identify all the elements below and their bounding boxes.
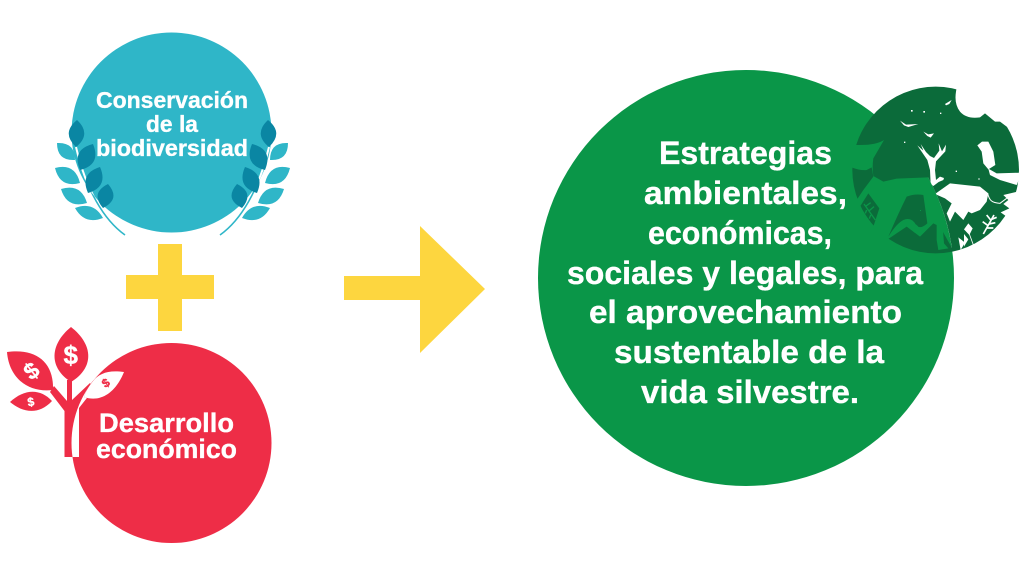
main text block: ambientales, <box>644 175 847 211</box>
leaf: right <box>84 371 124 399</box>
icon: money tree <box>7 327 124 457</box>
heading: biodiversidad: biodiversidad <box>96 135 248 161</box>
dollar sign: left leaf: $ <box>18 356 45 385</box>
leaf: left <box>7 351 53 390</box>
icon: wildlife circle <box>852 87 1019 253</box>
main text block: Estrategias <box>659 135 832 171</box>
icon: yellow plus sign <box>126 244 214 331</box>
icon: right laurel branch <box>220 120 290 235</box>
main text block: vida silvestre. <box>641 374 859 410</box>
icon: left laurel branch <box>55 120 125 235</box>
heading: de la: de la <box>146 111 199 137</box>
main text block: sociales y legales, para <box>567 255 923 291</box>
leaf: small <box>10 392 52 411</box>
main text block: sustentable de la <box>614 334 884 370</box>
panel: desarrollo económico <box>7 327 272 543</box>
dollar sign: right leaf: $ <box>99 375 113 391</box>
heading: económico: económico <box>96 434 237 464</box>
leaf: top <box>54 327 88 382</box>
panel: estrategias <box>538 70 1019 486</box>
teal circle <box>72 32 272 232</box>
main text block: el aprovechamiento <box>589 294 902 330</box>
red circle <box>72 343 272 543</box>
main text block: económicas, <box>648 215 832 251</box>
panel: conservación de la biodiversidad <box>55 32 290 235</box>
green circle <box>538 70 954 486</box>
heading: desarrollo: Desarrollo <box>99 408 234 438</box>
main text block <box>567 135 923 410</box>
tree trunk and branches <box>50 380 94 457</box>
dollar sign: top leaf: $ <box>64 340 78 370</box>
heading: conservación: Conservación <box>96 87 248 113</box>
arrow: yellow right arrow <box>344 226 485 353</box>
dollar sign: small leaf: $ <box>26 394 36 410</box>
